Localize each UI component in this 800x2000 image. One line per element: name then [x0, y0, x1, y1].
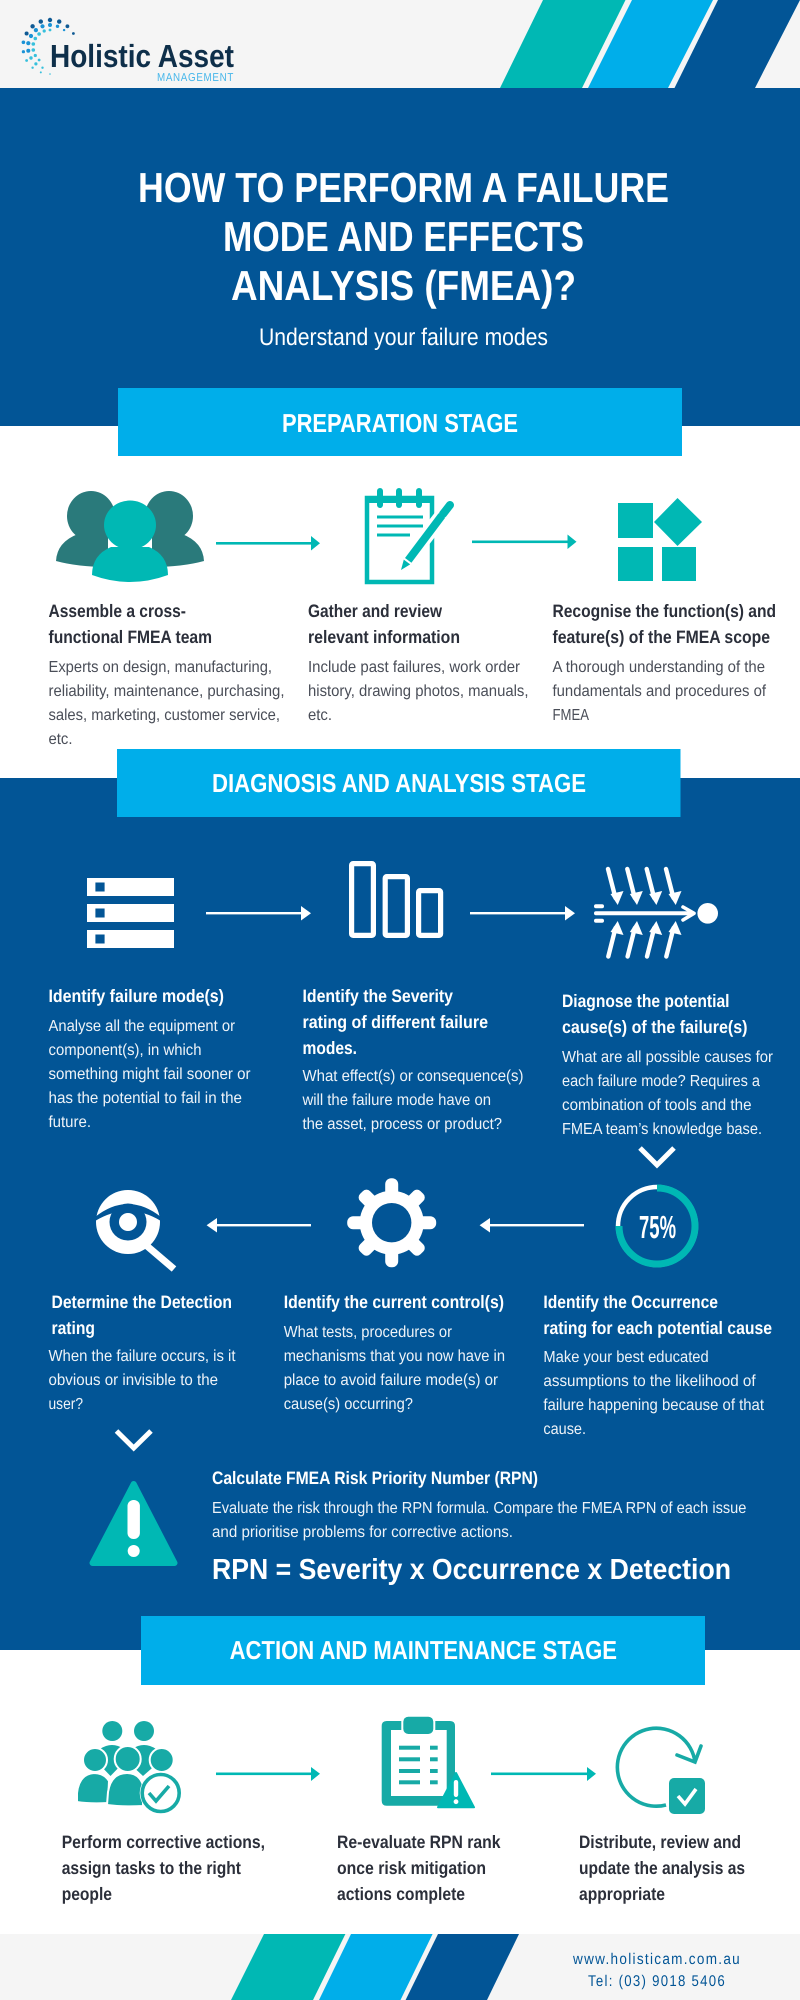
text: diagnose causes: Diagnose the potential [562, 991, 730, 1011]
footer contact details [572, 1951, 741, 1990]
text: calculate RPN: Calculate FMEA Risk Priority Number (RPN) [212, 1468, 538, 1488]
text: perform corrective actions: Perform corrective actions, [62, 1832, 265, 1852]
text: identify severity [302, 986, 524, 1133]
text: identify controls [284, 1292, 505, 1413]
icon: occurrence ring 75%: 75% [639, 1209, 676, 1245]
banner: preparation stage [118, 388, 682, 456]
text: diagnose causes [562, 991, 774, 1138]
text: distribute and review: appropriate [579, 1884, 665, 1904]
banner: preparation stage: PREPARATION STAGE [282, 408, 518, 438]
logo: Holistic Asset Management [22, 18, 234, 84]
text: identify severity: Identify the Severity [302, 986, 453, 1006]
text: identify occurrence: Identify the Occurrence [543, 1292, 718, 1312]
logo: Holistic Asset Management: MANAGEMENT [157, 72, 234, 84]
text: diagnose causes: combination of tools and the [562, 1097, 752, 1114]
text: re-evaluate RPN: actions complete [337, 1884, 465, 1904]
text: assemble team: sales, marketing, customer service, [48, 707, 280, 724]
text: diagnose causes: What are all possible causes for [562, 1049, 774, 1066]
icon: review cycle with check [617, 1728, 705, 1814]
arrow: severity to causes [470, 906, 575, 920]
text: identify occurrence: Make your best educated [543, 1349, 709, 1366]
text: recognise functions [552, 601, 776, 724]
arrow: team to information [216, 536, 320, 550]
text: identify occurrence: assumptions to the likelihood of [543, 1373, 756, 1390]
icon: server list [87, 878, 174, 948]
chevron: causes to occurrence [640, 1148, 674, 1165]
text: assemble team: reliability, maintenance, purchasing, [48, 683, 284, 700]
text: diagnose causes: each failure mode? Requires a [562, 1073, 760, 1090]
text: assemble team: functional FMEA team [48, 627, 212, 647]
banner: action and maintenance stage [141, 1616, 705, 1685]
text: identify failure modes: future. [48, 1114, 91, 1131]
banner: diagnosis and analysis stage: DIAGNOSIS AND ANALYSIS STAGE [212, 768, 586, 798]
icon: clipboard with warning [382, 1715, 474, 1807]
text: identify occurrence [543, 1292, 772, 1438]
text: identify failure modes: something might fail sooner or [48, 1066, 251, 1083]
text: determine detection: user? [48, 1396, 83, 1413]
title: MODE AND EFFECTS [223, 213, 584, 260]
text: diagnose causes: cause(s) of the failure(s) [562, 1017, 748, 1037]
arrow: re-evaluate to distribute [491, 1767, 596, 1781]
text: gather information: etc. [308, 707, 332, 724]
text: re-evaluate RPN: Re-evaluate RPN rank [337, 1832, 501, 1852]
icon: severity bars [352, 864, 441, 935]
text: distribute and review: update the analysis as [579, 1858, 745, 1878]
text: re-evaluate RPN [337, 1832, 501, 1904]
text: identify occurrence: cause. [543, 1421, 586, 1438]
header band [0, 0, 800, 88]
text: determine detection: Determine the Detection [52, 1292, 232, 1312]
text: calculate RPN [212, 1468, 746, 1586]
text: recognise functions: feature(s) of the FMEA scope [552, 627, 770, 647]
text: diagnose causes: FMEA team’s knowledge base. [562, 1121, 762, 1138]
diagnosis section background [0, 778, 800, 1650]
banner: diagnosis and analysis stage [117, 749, 680, 817]
icon: occurrence ring 75% [618, 1187, 696, 1265]
text: identify controls: What tests, procedures or [284, 1324, 453, 1341]
text: identify failure modes: has the potential to fail in the [48, 1090, 242, 1107]
icon: warning triangle [92, 1484, 174, 1563]
text: identify failure modes: Identify failure mode(s) [48, 986, 224, 1006]
icon: notepad and pencil [365, 491, 451, 582]
text: distribute and review [579, 1832, 745, 1904]
footer contact details: www.holisticam.com.au [572, 1951, 741, 1968]
icon: squares and diamond [618, 498, 702, 581]
text: re-evaluate RPN: once risk mitigation [337, 1858, 486, 1878]
arrow: occurrence to controls [480, 1218, 584, 1232]
text: perform corrective actions: assign tasks to the right [62, 1858, 241, 1878]
text: assemble team: etc. [48, 731, 72, 748]
text: identify failure modes: Analyse all the equipment or [48, 1018, 236, 1035]
icon: team with checkmark [77, 1721, 182, 1814]
footer band [0, 1934, 800, 2000]
icon: eye under magnifier [95, 1190, 174, 1269]
title: HOW TO PERFORM A FAILURE [138, 164, 669, 211]
icon: team of people [56, 491, 204, 582]
text: identify controls: mechanisms that you now have in [284, 1348, 505, 1365]
title [138, 164, 669, 309]
text: assemble team: Assemble a cross- [48, 601, 186, 621]
text: determine detection: rating [52, 1318, 95, 1338]
text: identify controls: Identify the current control(s) [284, 1292, 504, 1312]
icon: gear [347, 1178, 436, 1267]
text: identify controls: cause(s) occurring? [284, 1396, 413, 1413]
hero background [0, 88, 800, 426]
text: calculate RPN: and prioritise problems for corrective actions. [212, 1524, 513, 1541]
title: ANALYSIS (FMEA)? [231, 262, 576, 309]
text: gather information: history, drawing photos, manuals, [308, 683, 528, 700]
footer contact details: Tel: (03) 9018 5406 [588, 1973, 726, 1990]
text: identify failure modes [48, 986, 251, 1131]
icon: fishbone diagram [594, 869, 718, 956]
text: identify occurrence: rating for each potential cause [543, 1318, 772, 1338]
text: identify controls: place to avoid failure mode(s) or [284, 1372, 499, 1389]
text: perform corrective actions [62, 1832, 265, 1904]
arrow: controls to detection [207, 1218, 311, 1232]
text: identify occurrence: failure happening because of that [543, 1397, 765, 1414]
logo: Holistic Asset Management: Holistic Asset [50, 38, 234, 74]
text: recognise functions: FMEA [552, 707, 589, 724]
arrow: information to scope [472, 534, 576, 549]
text: assemble team: Experts on design, manufacturing, [48, 659, 272, 676]
text: determine detection: obvious or invisible to the [48, 1372, 218, 1389]
arrow: actions to re-evaluate [216, 1767, 320, 1781]
text: recognise functions: A thorough understanding of the [552, 659, 765, 676]
text: identify severity: modes. [302, 1038, 357, 1058]
text: assemble team [48, 601, 284, 748]
text: identify severity: What effect(s) or consequence(s) [302, 1068, 524, 1085]
text: perform corrective actions: people [62, 1884, 112, 1904]
text: identify severity: the asset, process or product? [302, 1116, 502, 1133]
RPN formula: RPN = Severity x Occurrence x Detection [212, 1554, 731, 1586]
text: distribute and review: Distribute, review and [579, 1832, 741, 1852]
text: identify severity: rating of different failure [302, 1012, 488, 1032]
text: calculate RPN: Evaluate the risk through the RPN formula. Compare the FMEA RPN of each issue [212, 1500, 746, 1517]
text: recognise functions: fundamentals and procedures of [552, 683, 767, 700]
subtitle: Understand your failure modes [259, 324, 548, 351]
text: identify severity: will the failure mode have on [302, 1092, 491, 1109]
arrow: failure mode to severity [206, 906, 311, 920]
text: determine detection: When the failure occurs, is it [48, 1348, 236, 1365]
text: determine detection [48, 1292, 236, 1413]
banner: action and maintenance stage: ACTION AND MAINTENANCE STAGE [230, 1635, 617, 1665]
text: gather information: relevant information [308, 627, 460, 647]
text: gather information [308, 601, 528, 724]
text: identify failure modes: component(s), in which [48, 1042, 202, 1059]
text: gather information: Gather and review [308, 601, 443, 621]
text: gather information: Include past failures, work order [308, 659, 521, 676]
chevron: detection to RPN [116, 1431, 151, 1448]
